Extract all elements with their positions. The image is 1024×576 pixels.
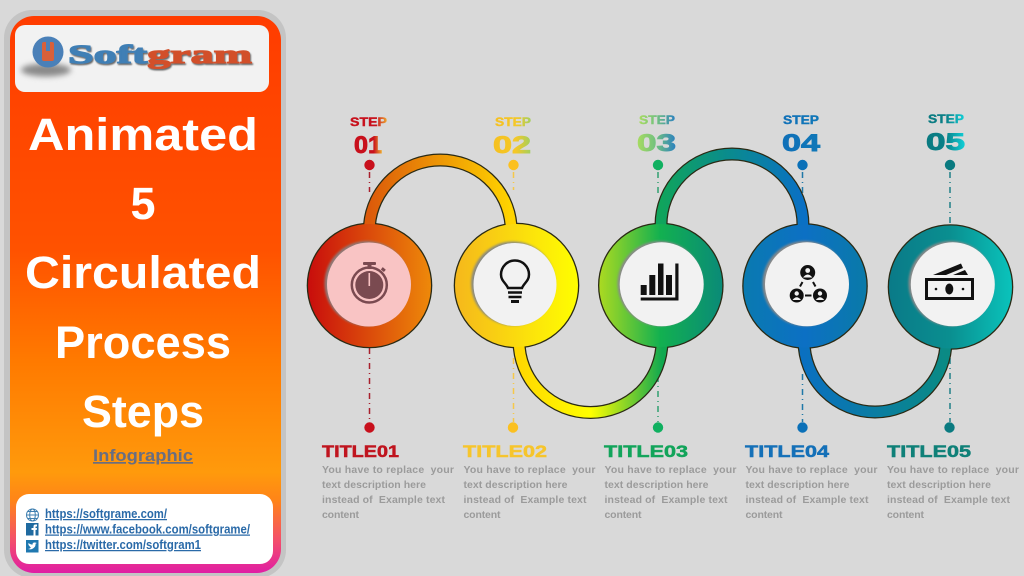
link: twitter: https://twitter.com/softgram1 [45, 538, 201, 552]
icon: stopwatch [352, 262, 387, 302]
description 5: content [887, 509, 924, 521]
logo shadow [21, 64, 71, 76]
description 4: You have to replace your [746, 464, 878, 476]
bottom dot 5 [944, 422, 955, 433]
icon: facebook [26, 523, 38, 536]
link: facebook: https://www.facebook.com/softgrame/ [45, 522, 250, 536]
step 3 [599, 115, 736, 521]
step label 4: STEP [783, 115, 819, 127]
circle outlines [307, 223, 1013, 350]
description 1: You have to replace your [322, 464, 454, 476]
description 4: text description here [746, 479, 850, 491]
ring 3 [599, 224, 722, 347]
logo wordmark: Soft gram [68, 40, 253, 69]
step number 1: 01 [354, 132, 382, 159]
description 3: text description here [604, 479, 709, 491]
description 3 [604, 464, 736, 521]
main title: Process [55, 317, 231, 368]
description 2: text description here [464, 479, 568, 491]
bottom dot 2 [508, 422, 518, 433]
arc: step 4 to 5 [804, 336, 946, 412]
step label 3: STEP [639, 115, 675, 127]
description 5: instead of Example text [887, 494, 1010, 506]
inner disc 2 [471, 242, 556, 326]
description 3: content [604, 509, 642, 521]
description 1: content [322, 509, 360, 521]
step 1 [308, 117, 454, 521]
main title: 5 [130, 178, 156, 229]
top dot 1 [364, 160, 375, 170]
icon: bar chart [641, 264, 678, 300]
sidebar border [4, 10, 286, 576]
icon: people network [790, 265, 827, 302]
step number 3: 03 [637, 130, 676, 157]
inner disc 5 [908, 241, 995, 326]
ring 2 [455, 224, 578, 347]
description 1: text description here [322, 479, 426, 491]
logo box [15, 25, 269, 92]
step number 2: 02 [493, 132, 531, 159]
description 5: text description here [887, 479, 991, 491]
title 3: TITLE03 [604, 443, 688, 461]
step number 5: 05 [926, 129, 965, 156]
dotted connector lines [370, 172, 950, 422]
step 4 [744, 115, 878, 521]
step label 1: STEP [350, 117, 387, 129]
main title: Circulated [25, 247, 261, 298]
links box [16, 494, 273, 564]
description 1: instead of Example text [322, 494, 446, 506]
icon: twitter [26, 540, 38, 552]
description 5 [887, 464, 1019, 521]
description 2: You have to replace your [464, 464, 596, 476]
title 4: TITLE04 [745, 443, 830, 461]
step label 2: STEP [495, 117, 531, 129]
description 5: You have to replace your [887, 464, 1019, 476]
top dot 4 [797, 160, 808, 170]
main title: Animated [28, 109, 258, 160]
inner disc 1 [324, 241, 411, 326]
description 1 [322, 464, 454, 521]
bottom dot 4 [797, 422, 808, 433]
sidebar gradient fill [10, 16, 281, 573]
description 3: instead of Example text [604, 494, 728, 506]
description 4: instead of Example text [746, 494, 869, 506]
description 3: You have to replace your [604, 464, 736, 476]
logo emblem [32, 36, 64, 68]
top dot 2 [508, 160, 519, 170]
ring 1 [308, 224, 431, 347]
icon: light bulb [501, 260, 529, 302]
arc: step 1 to 2 [370, 160, 511, 234]
description 2: content [464, 509, 501, 521]
step label 5: STEP [928, 114, 964, 126]
connector arcs outline [370, 154, 946, 412]
step number 4: 04 [782, 130, 821, 157]
link: website: https://softgrame.com/ [45, 507, 167, 521]
ring 5 [889, 226, 1012, 348]
bottom dot 1 [364, 422, 375, 433]
description 4: content [746, 509, 783, 521]
description 2 [464, 464, 596, 521]
step 2 [455, 117, 596, 521]
arc: step 2 to 3 [519, 336, 662, 412]
description 4 [746, 464, 878, 521]
bottom dot 3 [653, 422, 663, 433]
title 1: TITLE01 [322, 443, 399, 461]
ring 4 [744, 224, 866, 348]
title 2: TITLE02 [463, 443, 547, 461]
icon: globe [26, 509, 38, 521]
title 5: TITLE05 [887, 443, 971, 461]
icon: banknotes [926, 264, 972, 298]
step 5 [887, 114, 1019, 521]
arc: step 3 to 4 [661, 154, 803, 234]
inner disc 4 [762, 241, 849, 326]
panel: left sidebar [4, 10, 286, 576]
top dot 5 [945, 160, 955, 170]
subtitle: Infographic [93, 446, 193, 465]
description 2: instead of Example text [464, 494, 587, 506]
top dot 3 [653, 160, 663, 170]
inner disc 3 [618, 241, 704, 326]
main title [25, 109, 261, 437]
main title: Steps [82, 386, 204, 437]
